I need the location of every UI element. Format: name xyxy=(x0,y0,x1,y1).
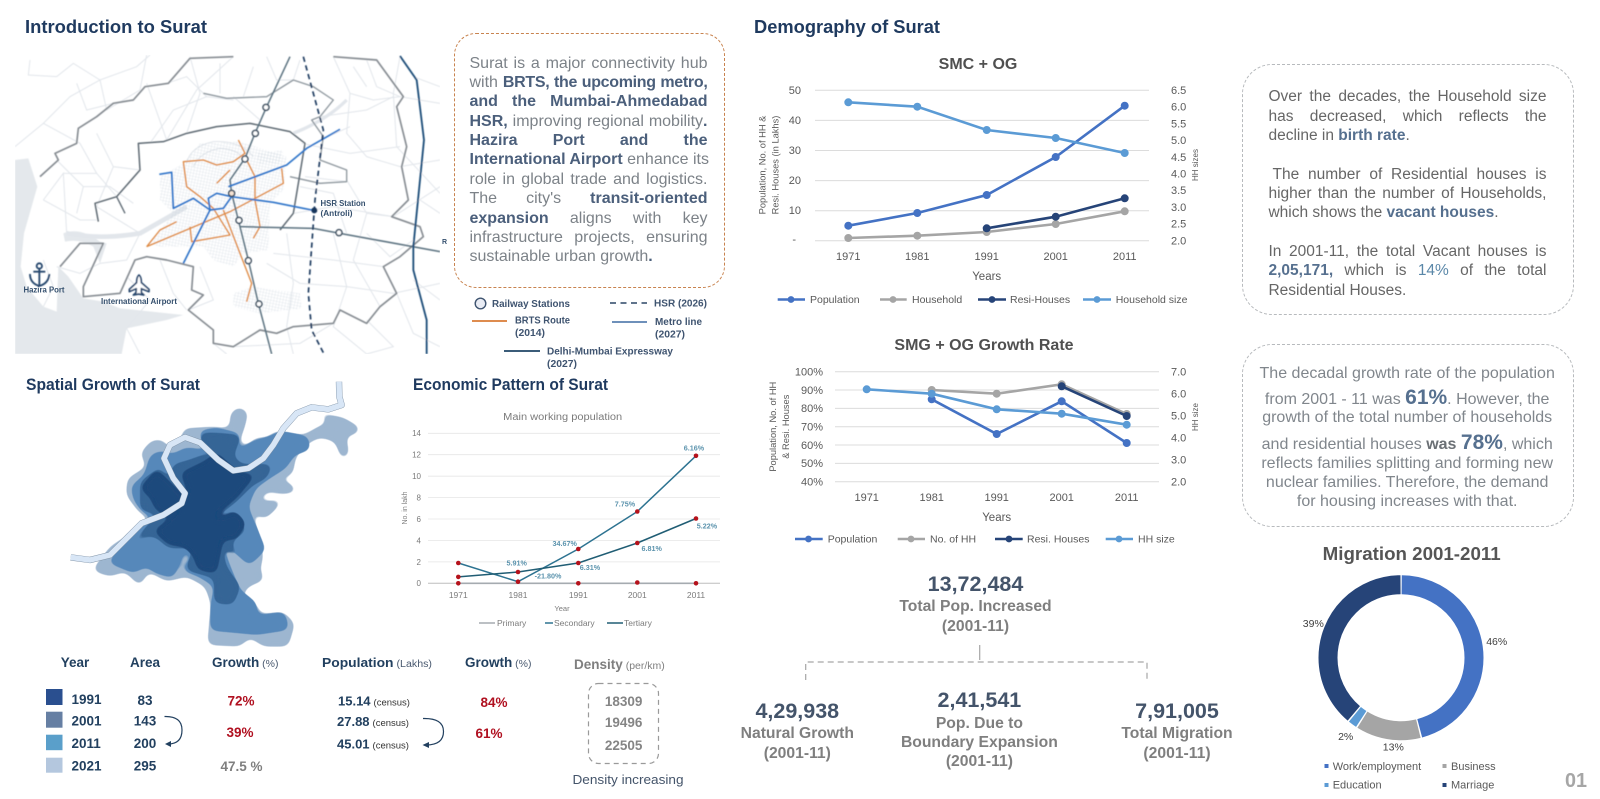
table headers: Density (per/km) xyxy=(574,657,665,672)
stat: total migration: 7,91,005 xyxy=(1135,699,1219,723)
callout: household size: decline in birth rate. xyxy=(1268,127,1410,144)
donut legend: Business xyxy=(1451,761,1496,773)
axis labels: 2001 xyxy=(1043,251,1068,263)
density values xyxy=(605,694,643,753)
line chart: SMG + OG growth rate: SMG + OG Growth Rate xyxy=(894,337,1074,354)
callout: growth rate: The decadal growth rate of the population xyxy=(1260,364,1555,382)
chart legend: Population xyxy=(810,294,860,306)
chart legend: Tertiary xyxy=(624,618,653,628)
callout: household size: which shows the vacant houses. xyxy=(1268,204,1499,221)
map legend: Railway Stations xyxy=(492,298,570,310)
axis labels: 2011 xyxy=(1115,492,1139,504)
heading: Economic Pattern of Surat: Economic Pattern of Surat xyxy=(413,376,608,394)
callout: household size: has decreased, which reflects the xyxy=(1268,108,1546,124)
callout: growth rate: reflects families splitting and forming new xyxy=(1261,455,1553,472)
stat: total population increase: 13,72,484 xyxy=(928,572,1023,596)
axis labels: 8 xyxy=(417,494,422,502)
map legend: (2027) xyxy=(547,358,577,370)
axis labels: 6.0 xyxy=(1171,388,1186,400)
axis labels: 50% xyxy=(801,458,823,470)
population values: 27.88 (census) xyxy=(337,714,409,729)
year and area values: 2021 xyxy=(72,758,102,774)
axis labels: - xyxy=(792,234,796,246)
donut legend: Marriage xyxy=(1451,780,1494,792)
map legend: BRTS Route xyxy=(515,314,570,326)
chart legend: Household size xyxy=(1116,294,1188,306)
map legend: HSR (2026) xyxy=(654,298,707,310)
donut segments xyxy=(1328,585,1474,731)
arrow: area growth xyxy=(164,716,182,744)
line chart: main working population: Main working population xyxy=(503,412,622,423)
map labels: HSR Station xyxy=(320,198,366,208)
line chart: main working population: 1981 xyxy=(509,590,528,600)
stat: boundary expansion xyxy=(901,688,1058,770)
callout: connectivity: The city's transit-oriented xyxy=(470,190,708,207)
donut percentages: 39% xyxy=(1303,618,1324,630)
chart legend: Household xyxy=(912,294,962,306)
population growth values xyxy=(475,695,508,741)
axis labels: 1991 xyxy=(984,492,1009,504)
stat: boundary expansion: Boundary Expansion xyxy=(901,734,1058,751)
growth labels: 6.16% xyxy=(684,444,705,452)
donut legend: Education xyxy=(1333,780,1382,792)
axis labels: 6.5 xyxy=(1171,85,1186,97)
line chart: SMC + OG: HH sizes xyxy=(1191,149,1200,181)
axis labels: 10 xyxy=(412,472,422,481)
axis labels xyxy=(412,429,422,588)
line chart: SMC + OG: Population, No. of HH & xyxy=(758,115,768,214)
expressway xyxy=(400,56,427,354)
legend swatches xyxy=(46,689,62,705)
layer: 2021 extent xyxy=(92,407,362,647)
year and area values: 1991 xyxy=(72,692,102,707)
density caption: Density increasing xyxy=(572,772,684,787)
axis labels: 1971 xyxy=(854,492,879,504)
stat: total migration: (2001-11) xyxy=(1143,745,1211,762)
series: tertiary xyxy=(458,518,696,577)
chart legend: Secondary xyxy=(554,618,595,628)
callout: connectivity: Surat is a major connectivity hub xyxy=(470,54,708,72)
BRTS routes xyxy=(147,140,283,302)
stat: total population increase: (2001-11) xyxy=(942,618,1009,635)
table headers xyxy=(61,655,665,672)
map labels: R xyxy=(442,239,447,246)
axis labels: 2 xyxy=(417,558,422,567)
axis labels: 5.5 xyxy=(1171,118,1186,130)
population breakdown tree xyxy=(741,572,1233,770)
callout: connectivity: role in global trade and logistics. xyxy=(470,171,708,188)
map legend xyxy=(472,298,707,370)
axis labels: 2.0 xyxy=(1171,235,1186,247)
axis labels: 12 xyxy=(412,450,422,460)
axis labels: 3.5 xyxy=(1171,185,1186,197)
callout: connectivity: Hazira Port and the xyxy=(470,132,708,149)
callout: household size: 2,05,171, which is 14% of the total xyxy=(1268,262,1546,279)
callout: household size xyxy=(1242,64,1574,315)
axis labels: 3.0 xyxy=(1171,454,1186,466)
donut percentages xyxy=(1303,618,1507,754)
series: household xyxy=(845,208,1128,242)
donut legend xyxy=(1324,761,1496,792)
river Tapi xyxy=(71,382,342,560)
axis labels: Years xyxy=(972,271,1001,283)
population growth values: 84% xyxy=(480,695,508,710)
axis labels: 2.0 xyxy=(1171,476,1186,488)
chart legend: No. of HH xyxy=(930,534,976,546)
axis labels: 2001 xyxy=(1049,492,1074,504)
donut legend: Work/employment xyxy=(1333,761,1421,773)
stat: total population increase: Total Pop. Increased xyxy=(899,598,1052,615)
growth labels: 7.75% xyxy=(615,500,636,508)
axis labels: 2.5 xyxy=(1171,219,1186,231)
density values: 19496 xyxy=(605,715,643,730)
series: population xyxy=(845,102,1128,229)
area growth values: 39% xyxy=(226,725,254,740)
heading: Introduction to Surat: Introduction to Surat xyxy=(25,16,207,37)
axis labels: 60% xyxy=(801,440,823,452)
line chart: main working population: 1991 xyxy=(569,590,588,600)
growth labels: -21.80% xyxy=(535,572,562,580)
stat: boundary expansion: 2,41,541 xyxy=(938,688,1021,712)
map: Surat connectivity xyxy=(15,55,440,354)
axis labels: 100% xyxy=(795,366,823,378)
chart legend: Resi-Houses xyxy=(1010,294,1070,306)
stat: natural growth: Natural Growth xyxy=(741,725,854,742)
dense city fabric xyxy=(150,142,302,313)
HSR line xyxy=(303,57,324,354)
gridlines xyxy=(835,372,1159,482)
map legend: (2027) xyxy=(655,328,685,340)
density box xyxy=(588,684,658,764)
population growth values: 61% xyxy=(475,726,503,741)
year and area values: 143 xyxy=(134,714,157,728)
table headers: Population (Lakhs) xyxy=(322,655,432,670)
axis labels: 0 xyxy=(417,579,422,588)
chart legend xyxy=(795,534,1175,546)
axis labels: 20 xyxy=(789,175,801,187)
stat: natural growth: 4,29,938 xyxy=(755,699,839,723)
line chart: main working population: 1971 xyxy=(449,590,468,600)
line chart: SMC + OG xyxy=(758,56,1200,306)
stat: boundary expansion: (2001-11) xyxy=(946,753,1013,770)
series: resi-houses xyxy=(983,195,1128,232)
icon: airplane xyxy=(129,275,149,295)
axis labels: 3.0 xyxy=(1171,202,1186,214)
year and area values: 200 xyxy=(134,736,156,751)
callout: connectivity: and the Mumbai-Ahmedabad xyxy=(470,93,708,110)
map: spatial growth layers xyxy=(71,382,362,647)
year and area values: 2011 xyxy=(72,736,101,751)
axis labels: 40% xyxy=(801,476,823,488)
stat: boundary expansion: Pop. Due to xyxy=(936,715,1023,732)
area growth values xyxy=(226,694,255,740)
table headers: Growth (%) xyxy=(212,655,278,670)
callout: household size: Over the decades, the Household size xyxy=(1268,88,1546,105)
callout: connectivity: expansion aligns with key xyxy=(470,210,708,227)
donut percentages: 13% xyxy=(1383,742,1404,754)
stat: total migration xyxy=(1121,699,1233,762)
table headers: Area xyxy=(130,655,160,670)
donut chart: migration 2001-2011 xyxy=(1303,544,1507,792)
axis labels: 1991 xyxy=(974,251,999,263)
axis labels: 4.0 xyxy=(1171,168,1186,180)
population values: 15.14 (census) xyxy=(338,694,410,708)
axis labels: 6 xyxy=(417,515,422,524)
map labels: Hazira Port xyxy=(24,284,65,294)
callout: connectivity xyxy=(454,33,725,288)
series: no. of HH xyxy=(928,381,1130,418)
map legend: (2014) xyxy=(515,327,545,339)
growth labels xyxy=(507,444,718,580)
series: population xyxy=(928,396,1130,446)
page number: 01 xyxy=(1565,770,1587,792)
axis labels: 90% xyxy=(801,385,823,397)
line chart: main working population xyxy=(402,412,720,628)
map legend: Delhi-Mumbai Expressway xyxy=(547,346,673,358)
series: secondary xyxy=(458,456,696,582)
axis labels: 10 xyxy=(789,205,801,217)
dashed connector xyxy=(806,645,1147,680)
callout: growth rate: nuclear families. Therefore, the demand xyxy=(1266,474,1548,491)
year and area values xyxy=(72,692,157,774)
gridlines xyxy=(815,90,1149,241)
donut percentages: 2% xyxy=(1338,731,1353,743)
growth labels: 5.22% xyxy=(697,522,718,530)
population values: 45.01 (census) xyxy=(337,736,409,752)
area and population table: 47.5 % xyxy=(220,759,263,774)
map labels: International Airport xyxy=(101,296,177,306)
callout: growth rate: growth of the total number of households xyxy=(1262,409,1552,426)
axis labels: 1971 xyxy=(836,251,861,263)
line chart: SMG + OG growth rate xyxy=(768,337,1200,546)
area and population table xyxy=(46,655,684,787)
line chart: SMG + OG growth rate: HH size xyxy=(1191,402,1200,431)
arrow: population growth xyxy=(423,718,444,745)
line chart: main working population: Year xyxy=(554,604,570,613)
chart legend xyxy=(479,618,653,628)
line chart: SMG + OG growth rate: Population, No. of HH xyxy=(768,382,778,472)
donut chart: migration 2001-2011: Migration 2001-2011 xyxy=(1323,544,1501,564)
line chart: main working population: 2001 xyxy=(628,590,647,600)
axis labels: 5.0 xyxy=(1171,135,1186,147)
callout: connectivity: infrastructure projects, ensuring xyxy=(470,229,708,246)
layer: 2001 extent xyxy=(127,433,273,605)
railway stations xyxy=(229,104,342,307)
axis labels: 5.0 xyxy=(1171,410,1186,422)
callout: connectivity: sustainable urban growth. xyxy=(470,248,653,265)
axis labels: 1981 xyxy=(919,492,944,504)
growth labels: 6.81% xyxy=(642,544,662,553)
axis labels: 7.0 xyxy=(1171,366,1186,378)
line chart: SMG + OG growth rate: & Resi. Houses xyxy=(781,394,791,459)
axis labels: 30 xyxy=(789,145,801,157)
icon: anchor xyxy=(30,263,49,286)
line chart: SMC + OG: SMC + OG xyxy=(939,56,1017,73)
line chart: main working population: 2011 xyxy=(687,590,705,600)
map legend: Metro line xyxy=(655,316,702,328)
sea and estuary xyxy=(15,158,183,354)
year and area values: 83 xyxy=(137,693,153,708)
axis labels: 80% xyxy=(801,403,823,415)
series: household size xyxy=(845,99,1128,156)
chart legend: Population xyxy=(828,534,877,546)
stat: total migration: Total Migration xyxy=(1121,725,1233,742)
HSR station marker xyxy=(311,207,317,213)
axis labels: 2011 xyxy=(1113,251,1137,263)
axis labels xyxy=(795,366,1186,524)
chart legend: Primary xyxy=(497,618,527,628)
year and area values: 2001 xyxy=(72,714,102,728)
axis labels: 14 xyxy=(412,429,422,438)
growth labels: 6.31% xyxy=(580,563,601,572)
population values xyxy=(337,694,410,752)
callout: growth rate: from 2001 - 11 was 61%. However, the xyxy=(1265,386,1549,408)
year and area values: 295 xyxy=(134,758,157,774)
axis labels: 6.0 xyxy=(1171,102,1186,114)
axis labels: 4.0 xyxy=(1171,432,1186,444)
table headers: Growth (%) xyxy=(465,655,532,670)
heading: Spatial Growth of Surat: Spatial Growth of Surat xyxy=(26,376,200,394)
donut percentages: 46% xyxy=(1486,636,1507,648)
axis labels: 70% xyxy=(801,422,823,434)
growth labels: 5.91% xyxy=(507,558,527,568)
chart legend: Resi. Houses xyxy=(1027,534,1089,546)
axis labels: 1981 xyxy=(905,251,930,263)
callout: household size: Residential Houses. xyxy=(1268,282,1406,298)
callout: household size: In 2001-11, the total Vacant houses is xyxy=(1268,243,1546,260)
table headers: Year xyxy=(61,655,90,670)
chart legend: HH size xyxy=(1138,534,1175,546)
axis labels: 40 xyxy=(789,115,801,127)
axis labels: 4 xyxy=(417,536,422,546)
chart legend xyxy=(778,294,1188,306)
axis labels xyxy=(789,85,1186,283)
series: primary xyxy=(458,582,696,584)
callout: household size: The number of Residential houses is xyxy=(1272,166,1546,182)
railway lines xyxy=(230,57,440,354)
callout: connectivity: HSR, improving regional mobility. xyxy=(470,113,708,130)
layer: 2011 extent xyxy=(107,427,311,635)
density values: 22505 xyxy=(605,738,643,753)
metro lines xyxy=(159,129,340,263)
callout: household size: higher than the number of Households, xyxy=(1268,185,1546,202)
heading: Demography of Surat: Demography of Surat xyxy=(754,16,940,37)
area growth values: 72% xyxy=(227,694,255,708)
stat: natural growth xyxy=(741,699,854,762)
series: resi. houses xyxy=(1058,383,1130,420)
minor road network xyxy=(15,55,440,354)
stat: total population increase xyxy=(899,572,1052,635)
stat: natural growth: (2001-11) xyxy=(764,745,831,762)
density values: 18309 xyxy=(605,694,642,709)
axis labels: 4.5 xyxy=(1171,152,1186,164)
axis labels: 50 xyxy=(789,85,801,97)
callout: connectivity: International Airport enhance its xyxy=(470,151,709,168)
layer: 1991 extent xyxy=(139,452,257,574)
callout: growth rate: and residential houses was 78%, which xyxy=(1262,431,1553,454)
callout: growth rate: for housing increases with that. xyxy=(1297,493,1517,510)
callout: connectivity: with BRTS, the upcoming metro, xyxy=(470,74,707,91)
gridlines xyxy=(428,433,720,562)
map labels: (Antroli) xyxy=(320,208,353,218)
line chart: SMC + OG: Resi. Houses (in Lakhs) xyxy=(770,116,780,214)
axis labels: Years xyxy=(982,512,1011,524)
callout: growth rate xyxy=(1242,344,1574,527)
series: HH size xyxy=(863,386,1130,428)
growth labels: 34.67% xyxy=(553,539,577,548)
data markers xyxy=(456,454,698,586)
map labels xyxy=(24,198,447,306)
district boundaries xyxy=(40,57,423,347)
line chart: main working population: No. in lakh xyxy=(402,491,409,525)
